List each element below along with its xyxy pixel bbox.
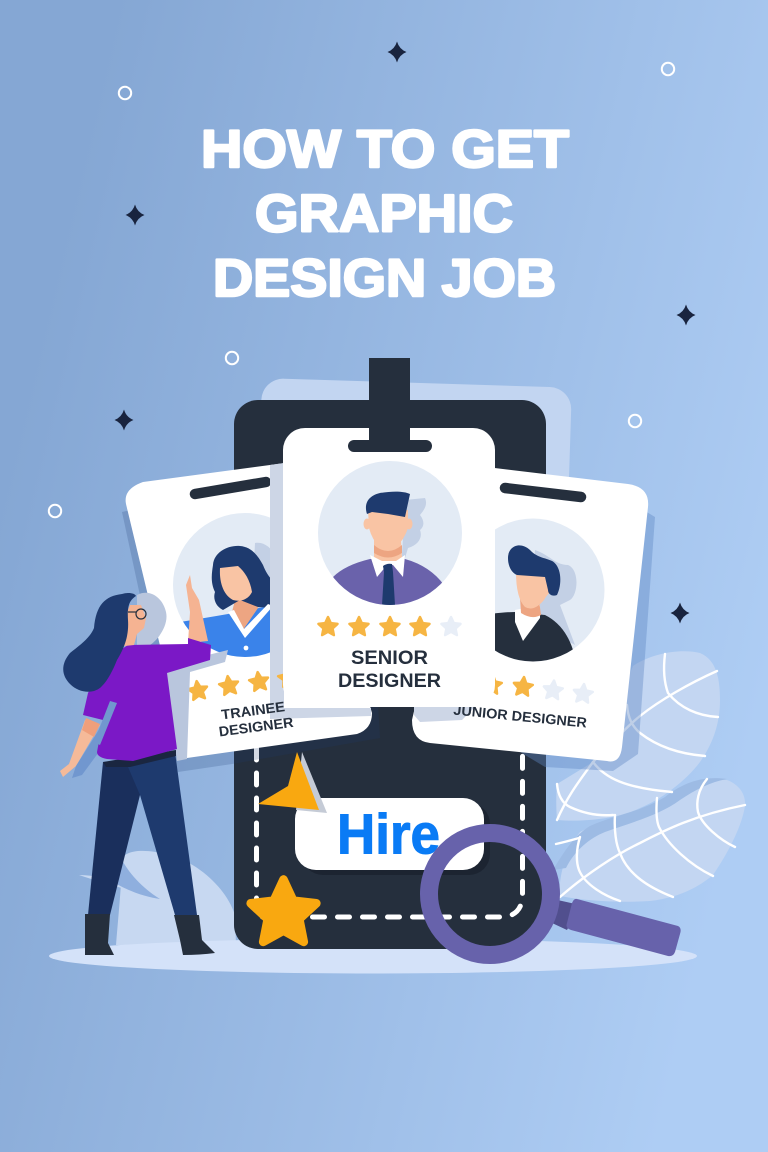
clipboard board — [234, 358, 546, 949]
face — [124, 605, 146, 646]
ground ellipse — [49, 938, 697, 974]
woman figure — [60, 575, 228, 955]
rating stars — [187, 667, 299, 700]
label: SENIOR — [351, 648, 428, 669]
avatar: senior man — [333, 492, 445, 610]
boots — [85, 914, 215, 955]
label: DESIGNER — [338, 671, 441, 692]
hair — [63, 593, 136, 692]
avatar: woman — [183, 542, 270, 657]
title: GRAPHIC — [255, 184, 513, 244]
center card shadow on this card — [270, 463, 371, 719]
large star — [251, 880, 316, 942]
card: junior designer — [412, 465, 655, 771]
lower arm — [60, 718, 104, 778]
rating stars — [318, 617, 461, 635]
plant behind the figure — [79, 851, 236, 945]
title: DESIGN JOB — [213, 249, 556, 308]
title — [201, 120, 569, 308]
clip and slot — [348, 415, 432, 452]
label: JUNIOR DESIGNER — [453, 702, 588, 731]
decorative rings — [49, 63, 674, 517]
card: senior designer — [283, 415, 495, 707]
back panel — [255, 378, 572, 608]
shirt — [83, 638, 211, 761]
pants — [88, 750, 197, 915]
magnifying glass — [429, 833, 681, 956]
leaves right — [553, 651, 745, 902]
glasses — [128, 609, 146, 619]
avatar: young man — [495, 545, 576, 662]
sleeve fold — [94, 701, 117, 745]
dashed stitching — [256, 748, 522, 917]
shadow of figure on card — [137, 593, 228, 761]
decorative sparkles — [114, 42, 696, 624]
hire button: Hire — [337, 802, 440, 866]
title: HOW TO GET — [201, 120, 569, 179]
label: DESIGNER — [218, 714, 294, 739]
raised arm — [186, 575, 208, 643]
cursor arrow — [258, 752, 327, 813]
card: trainee designer — [122, 461, 380, 772]
label — [218, 698, 294, 739]
rating stars — [482, 674, 594, 703]
clip — [369, 358, 410, 448]
hire button — [295, 798, 490, 875]
label: TRAINEE — [220, 698, 286, 722]
center card shadow on this card — [414, 707, 475, 722]
label — [338, 648, 441, 692]
